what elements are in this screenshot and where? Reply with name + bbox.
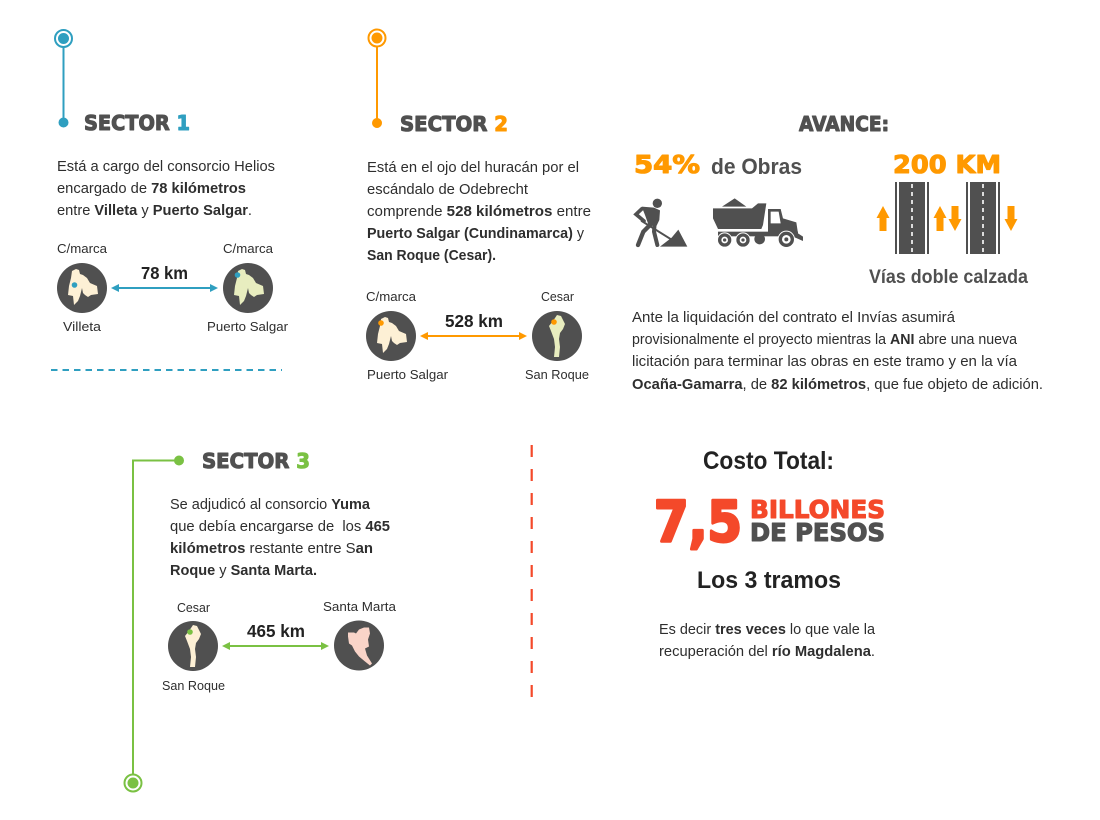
text: costo description	[659, 621, 876, 660]
text: sector 1 description: encargado de 78 kilómetros	[57, 180, 246, 197]
map route: Villeta to Puerto Salgar: Villeta	[63, 319, 102, 334]
map route: Puerto Salgar to San Roque: San Roque	[525, 367, 589, 382]
text: avance description	[632, 309, 1043, 393]
caption: vias doble calzada: Vías doble calzada	[869, 267, 1028, 288]
heading: avance: AVANCE:	[799, 112, 889, 136]
stat: 7,5 billones de pesos: DE PESOS	[750, 518, 885, 547]
timeline: sector 2	[368, 30, 386, 128]
icon: dump truck	[713, 198, 803, 247]
subheading: los 3 tramos: Los 3 tramos	[697, 567, 841, 594]
map route: Villeta to Puerto Salgar: C/marca	[223, 241, 274, 256]
stat: 54% de obras	[634, 150, 802, 179]
map route: San Roque to Santa Marta: 465 km	[247, 621, 305, 641]
icon: worker with shovel	[636, 199, 687, 247]
stat: 7,5 billones de pesos	[654, 490, 885, 555]
heading: sector 2: SECTOR 2	[400, 112, 508, 136]
timeline: sector 3	[124, 456, 184, 792]
text: sector 1 description	[57, 158, 275, 219]
text: avance description: Ocaña-Gamarra, de 82 kilómetros, que fue objeto de adición.	[632, 376, 1043, 393]
text: sector 2 description: comprende 528 kilómetros entre	[367, 203, 591, 220]
text: avance description: provisionalmente el proyecto mientras la ANI abre una nueva	[632, 331, 1018, 348]
map route: Puerto Salgar to San Roque	[366, 289, 589, 382]
map route: San Roque to Santa Marta	[162, 599, 397, 693]
map route: San Roque to Santa Marta: Santa Marta	[323, 599, 397, 614]
panel: sector 3	[124, 449, 397, 792]
text: sector 3 description: Roque y Santa Marta.	[170, 562, 317, 579]
panel: costo total	[654, 447, 885, 660]
map route: Puerto Salgar to San Roque: Cesar	[541, 289, 575, 304]
text: sector 3 description: que debía encargarse de los 465	[170, 518, 390, 535]
text: sector 3 description	[170, 496, 390, 579]
stat: 7,5 billones de pesos: BILLONES	[750, 495, 885, 524]
map route: Villeta to Puerto Salgar: Puerto Salgar	[207, 319, 289, 334]
map route: Villeta to Puerto Salgar: 78 km	[141, 263, 188, 283]
map route: San Roque to Santa Marta: San Roque	[162, 678, 225, 693]
stat: 7,5 billones de pesos: 7,5	[654, 490, 742, 555]
heading: sector 3: SECTOR 3	[202, 449, 310, 473]
text: costo description: recuperación del río Magdalena.	[659, 643, 875, 660]
timeline: sector 1	[55, 30, 72, 128]
icon: two roads with direction arrows	[876, 182, 1018, 254]
text: avance description: Ante la liquidación del contrato el Invías asumirá	[632, 309, 956, 326]
map route: Puerto Salgar to San Roque: Puerto Salgar	[367, 367, 449, 382]
panel: sector 1	[55, 30, 289, 334]
text: avance description: licitación para terminar las obras en este tramo y en la vía	[632, 353, 1018, 370]
map route: Puerto Salgar to San Roque: C/marca	[366, 289, 417, 304]
panel: avance	[632, 112, 1043, 393]
map route: San Roque to Santa Marta: Cesar	[177, 600, 211, 615]
text: sector 2 description: Está en el ojo del huracán por el	[367, 159, 579, 176]
map route: Puerto Salgar to San Roque: 528 km	[445, 311, 503, 331]
text: sector 2 description: escándalo de Odebrecht	[367, 181, 529, 198]
heading: costo total: Costo Total:	[703, 447, 834, 475]
text: sector 1 description: entre Villeta y Puerto Salgar.	[57, 202, 252, 219]
stat: 54% de obras: de Obras	[711, 154, 802, 179]
text: costo description: Es decir tres veces lo que vale la	[659, 621, 876, 638]
text: sector 3 description: kilómetros restante entre San	[170, 540, 373, 557]
text: sector 1 description: Está a cargo del consorcio Helios	[57, 158, 275, 175]
text: sector 2 description	[367, 159, 591, 264]
text: sector 3 description: Se adjudicó al consorcio Yuma	[170, 496, 371, 513]
stat: 54% de obras: 54%	[634, 150, 700, 179]
map route: Villeta to Puerto Salgar	[57, 241, 289, 334]
stat: 200 km: 200 KM	[893, 150, 1001, 179]
text: sector 2 description: Puerto Salgar (Cundinamarca) y	[367, 225, 584, 242]
panel: sector 2	[366, 30, 591, 382]
map route: Villeta to Puerto Salgar: C/marca	[57, 241, 108, 256]
heading: sector 1: SECTOR 1	[84, 111, 190, 135]
text: sector 2 description: San Roque (Cesar).	[367, 247, 496, 264]
